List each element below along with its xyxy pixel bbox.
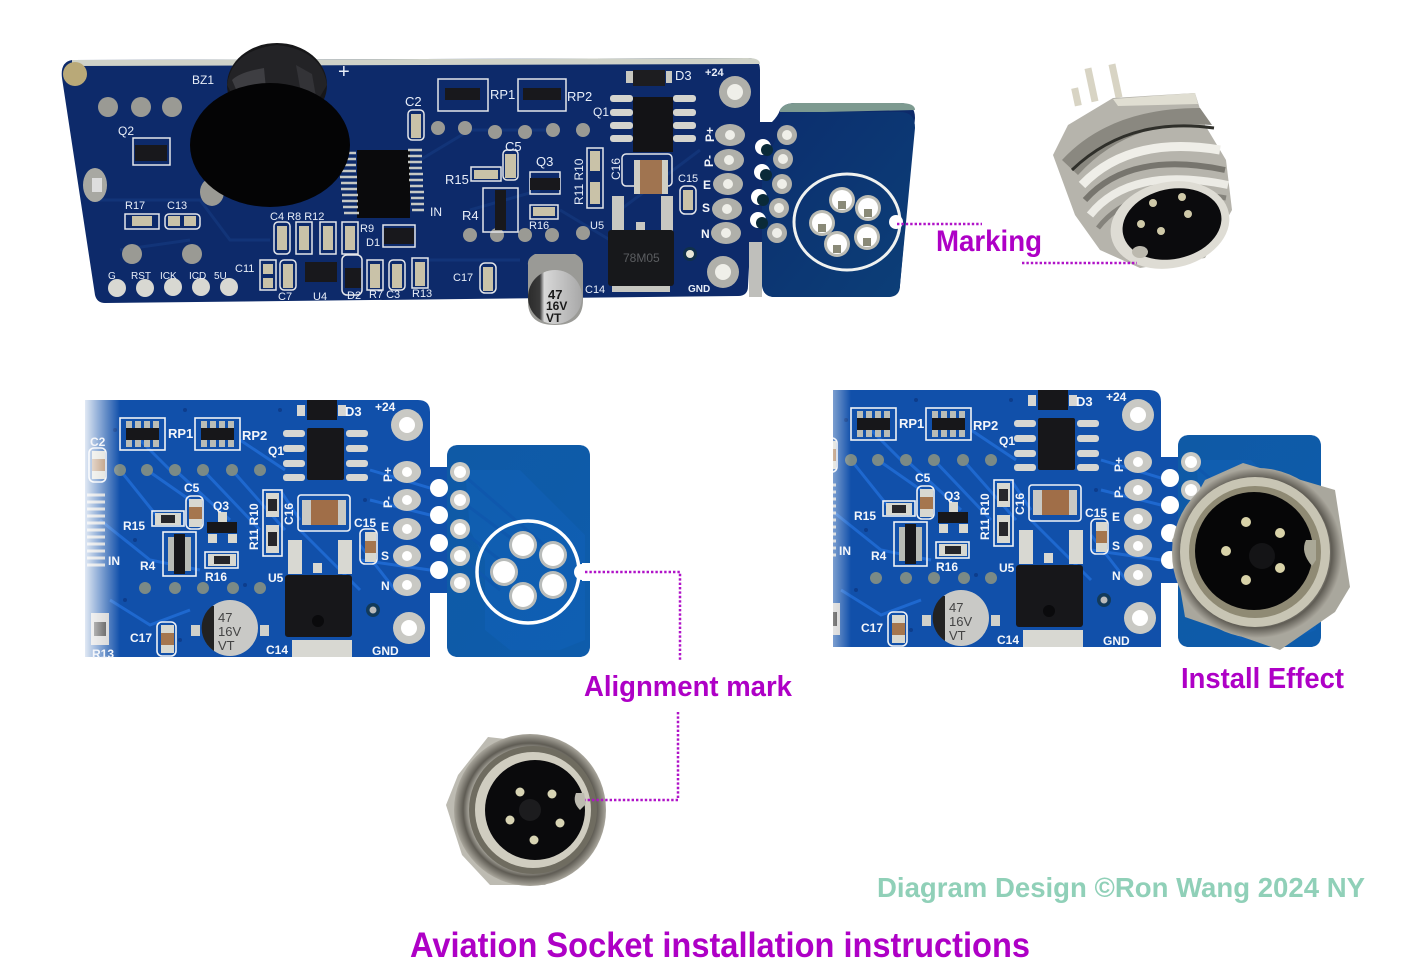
board 1 silkscreen labels: U4 [313, 291, 327, 303]
board 3 silkscreen labels: D3 [1076, 394, 1093, 409]
board 2 silkscreen labels: R16 [205, 570, 227, 584]
capacitor [528, 254, 583, 325]
label: Install Effect: Install Effect [1181, 663, 1344, 695]
board 3 left fade [811, 385, 833, 653]
board 2: alignment mark view [80, 395, 590, 663]
board 2 silkscreen labels: N [381, 579, 390, 593]
buzzer [190, 43, 350, 207]
board 1 silkscreen labels: R7 C3 [369, 289, 400, 301]
board 1 silkscreen labels: Q3 [536, 154, 553, 169]
board 1 silkscreen labels: R9 [360, 223, 374, 235]
board 2 silkscreen labels: C16 [282, 503, 296, 525]
alignment circle [794, 174, 903, 270]
leader: marking on socket [1022, 262, 1137, 264]
board 1 silkscreen labels: C17 [453, 272, 473, 284]
board 1 silkscreen labels: R16 [529, 220, 549, 232]
board 3 silkscreen labels: IN [839, 544, 851, 558]
title: Aviation Socket installation instructions [410, 926, 1030, 965]
board 2 silkscreen labels: 47 [218, 610, 232, 625]
board 1 silkscreen labels: C2 [405, 94, 422, 109]
left header pads and vias [98, 97, 590, 264]
board 1 silkscreen labels: C15 [678, 173, 698, 185]
board 1 silkscreen labels: + [338, 61, 350, 83]
board 2 silkscreen labels: C17 [130, 631, 152, 645]
board 1 silkscreen labels: C13 [167, 200, 187, 212]
board 3 silkscreen labels: 47 [949, 600, 963, 615]
board 2 silkscreen labels: C5 [184, 481, 200, 495]
board 3 silkscreen labels: RP2 [973, 418, 998, 433]
board 3 silkscreen labels: R11 R10 [978, 493, 992, 540]
board 3 silkscreen labels: RP1 [899, 416, 924, 431]
board 2 silkscreen labels [90, 400, 399, 661]
connector photo: side view of socket [1053, 64, 1238, 280]
board 3 silkscreen labels: GND [1103, 634, 1130, 648]
board 1 silkscreen labels: U5 [590, 220, 604, 232]
capacitor: 47 [548, 287, 562, 302]
board 1 silkscreen labels: D2 [347, 290, 361, 302]
small components [132, 114, 693, 291]
board 3 silkscreen labels: +24 [1106, 390, 1127, 404]
board 1 silkscreen labels: C16 [609, 158, 623, 180]
board 1 silkscreen labels: P+ [703, 127, 717, 142]
board 3 silkscreen labels: U5 [999, 561, 1015, 575]
board 2 silkscreen labels: R4 [140, 559, 156, 573]
board 1 silkscreen labels: S [702, 201, 710, 215]
c16 [634, 160, 668, 194]
q1 [610, 95, 696, 152]
board 3 silkscreen labels: C17 [861, 621, 883, 635]
board 3 silkscreen labels: R15 [854, 509, 876, 523]
board 3 silkscreen labels [839, 390, 1130, 648]
leader: alignment mark on socket [585, 712, 678, 800]
board 1 silkscreen labels: Q2 [118, 124, 134, 138]
board 1 silkscreen labels: ICD [189, 271, 206, 282]
board 3 silkscreen labels: S [1112, 539, 1120, 553]
board 2 silkscreen labels: Q1 [268, 444, 284, 458]
board 2 silkscreen labels: C2 [90, 435, 106, 449]
d3 [626, 70, 672, 86]
connector photo: front view of socket [446, 734, 606, 886]
board 2 silkscreen labels: RP1 [168, 426, 193, 441]
board 1 silkscreen labels: R15 [445, 172, 469, 187]
board 1 silkscreen labels: C14 [585, 284, 605, 296]
board 2 silkscreen labels: Q3 [213, 499, 229, 513]
board 1 silkscreen labels: R13 [412, 288, 432, 300]
board 2 silkscreen labels: S [381, 549, 389, 563]
board 1 silkscreen labels: D1 [366, 237, 380, 249]
board 3 silkscreen labels: VT [949, 628, 966, 643]
board 3 silkscreen labels: Q1 [999, 434, 1015, 448]
board 2 silkscreen labels: +24 [375, 400, 396, 414]
board 1 silkscreen labels: RP2 [567, 89, 592, 104]
board 1: full PCB with buzzer [62, 43, 915, 325]
board 2 silkscreen labels: P+ [381, 467, 395, 482]
board 1 silkscreen labels: N [701, 227, 710, 241]
board 1 silkscreen labels: IN [430, 205, 442, 219]
board 1 silkscreen labels: D3 [675, 68, 692, 83]
board 2 silkscreen labels: U5 [268, 571, 284, 585]
board 3 silkscreen labels: C14 [997, 633, 1019, 647]
board 1 silkscreen labels: 5U [214, 271, 227, 282]
board 2 silkscreen labels: R13 [92, 647, 114, 661]
central ic [339, 150, 424, 218]
board 3 silkscreen labels: C16 [1013, 493, 1027, 515]
board 3 silkscreen labels: R4 [871, 549, 887, 563]
board 1 silkscreen labels: C11 [235, 263, 254, 275]
board 2 silkscreen labels: IN [108, 554, 120, 568]
label: Alignment mark: Alignment mark [584, 671, 793, 703]
board 1 silkscreen labels: G [108, 271, 116, 282]
board 3 silkscreen labels: Q3 [944, 489, 960, 503]
board 3 silkscreen labels: 16V [949, 614, 972, 629]
capacitor: VT [546, 311, 562, 325]
credit line: Diagram Design ©Ron Wang 2024 NY [877, 872, 1365, 903]
board 2 silkscreen labels: C15 [354, 516, 376, 530]
board 2 silkscreen labels: R15 [123, 519, 145, 533]
board 1 silkscreen labels: P- [702, 155, 716, 167]
board 2 silkscreen labels: D3 [345, 404, 362, 419]
leader: marking on board [897, 223, 982, 225]
board 1 silkscreen labels: GND [688, 284, 710, 295]
board 1 silkscreen labels: BZ1 [192, 73, 214, 87]
u5 regulator [608, 196, 674, 292]
board 2 silkscreen labels: VT [218, 638, 235, 653]
board 2 silkscreen labels: E [381, 520, 389, 534]
board 1 silkscreen labels: R4 [462, 208, 479, 223]
board 1 silkscreen labels: C5 [505, 139, 522, 154]
connector installed on board [1172, 463, 1350, 650]
board 1 silkscreen labels: +24 [705, 67, 725, 79]
board 1 silkscreen labels: C7 [278, 291, 292, 303]
board 2 silkscreen labels: 16V [218, 624, 241, 639]
u5 regulator: 78M05 [623, 251, 660, 265]
board 3 silkscreen labels: P+ [1112, 457, 1126, 472]
board 1 silkscreen labels [108, 61, 725, 303]
board 2 silkscreen labels: P- [381, 496, 395, 508]
board 3 silkscreen labels: N [1112, 569, 1121, 583]
board 3 silkscreen labels: C15 [1085, 506, 1107, 520]
board 2 silkscreen labels: RP2 [242, 428, 267, 443]
mounting corner hole [63, 62, 87, 86]
board 1 silkscreen labels: R11 R10 [572, 158, 586, 205]
q2 [125, 79, 696, 295]
board 3 silkscreen labels: C5 [915, 471, 931, 485]
board 3 silkscreen labels: E [1112, 510, 1120, 524]
board 2 silkscreen labels: GND [372, 644, 399, 658]
board 1 silkscreen labels: Q1 [593, 105, 609, 119]
label: Marking: Marking [936, 225, 1042, 258]
board 1 silkscreen labels: C4 R8 R12 [270, 211, 324, 223]
capacitor: 16V [546, 299, 567, 313]
board 1 silkscreen labels: RP1 [490, 87, 515, 102]
board 2 silkscreen labels: C14 [266, 643, 288, 657]
board 1 silkscreen labels: R17 [125, 200, 145, 212]
board 1 silkscreen labels: RST [131, 271, 151, 282]
leader: alignment mark on board [585, 572, 680, 660]
board 1 silkscreen labels: ICK [160, 271, 177, 282]
board 3 silkscreen labels: R16 [936, 560, 958, 574]
board 1 silkscreen labels: E [703, 178, 711, 192]
board 3 silkscreen labels: P- [1112, 486, 1126, 498]
board 3: installed effect [811, 385, 1321, 653]
board 2 silkscreen labels: R11 R10 [247, 503, 261, 550]
large pads [707, 76, 797, 288]
